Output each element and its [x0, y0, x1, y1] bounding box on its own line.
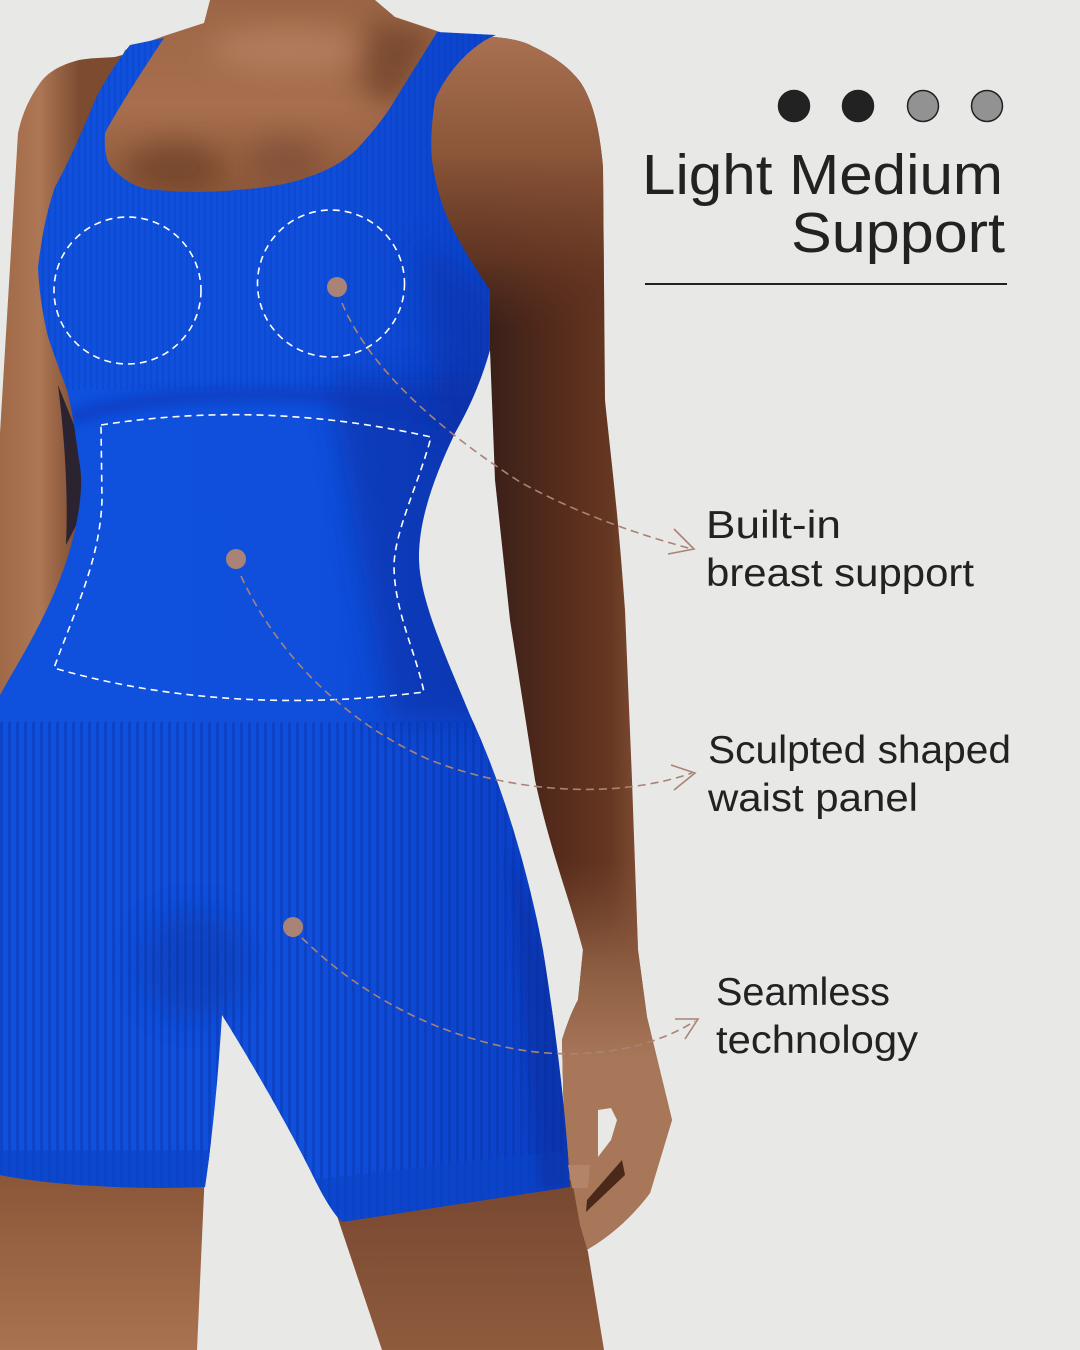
label: sculpted shaped waist panel: Sculpted shaped [708, 729, 1011, 772]
waist panel outline [54, 415, 431, 700]
cleavage shading right [245, 136, 325, 184]
callout connectors [226, 277, 698, 1054]
title [642, 143, 1005, 265]
connector: waist panel [226, 549, 695, 790]
label: seamless technology [716, 971, 919, 1062]
label: sculpted shaped waist panel: waist panel [707, 777, 918, 820]
chest shadow right [360, 20, 440, 110]
neck highlight [210, 28, 370, 72]
label: built-in breast support: breast support [706, 552, 974, 595]
hem of right leg [310, 1150, 570, 1225]
label: built-in breast support: Built-in [706, 504, 841, 547]
hem of left leg [0, 1150, 210, 1188]
label: built-in breast support [706, 504, 974, 595]
gap between fingers [598, 1108, 617, 1157]
inner thigh shadow [140, 910, 250, 1020]
left bust circle [54, 217, 201, 364]
armhole shading [416, 250, 490, 438]
fingernail [568, 1165, 590, 1188]
connector: seamless [283, 917, 698, 1054]
bust ribs [42, 32, 494, 390]
torso right shading [330, 380, 500, 720]
neck and chest skin [104, 0, 440, 192]
thigh: left in image [0, 1170, 205, 1350]
model's right arm (image left) [0, 50, 140, 720]
model's left arm and hand [425, 30, 685, 1270]
support level dots [778, 90, 1002, 122]
bodysuit [0, 32, 570, 1222]
figure: model wearing blue bodysuit [0, 0, 685, 1350]
connector: breast support [327, 277, 694, 554]
label: seamless technology: technology [716, 1019, 919, 1062]
hand [562, 880, 672, 1250]
label: sculpted shaped waist panel [707, 729, 1011, 820]
right bust circle [258, 210, 404, 357]
dashed outlines marking support zones [54, 210, 431, 700]
title: Support [791, 201, 1005, 265]
hand crease [586, 1160, 625, 1212]
shorts ribs [0, 722, 600, 1222]
label: seamless technology: Seamless [716, 971, 890, 1014]
title: Light Medium [642, 143, 1003, 207]
bust band shading [72, 385, 342, 424]
right edge shadow [510, 868, 570, 1191]
cleavage shading [125, 142, 225, 194]
thigh: right in image [335, 1180, 604, 1350]
mesh shadow under arm [58, 385, 84, 545]
title rule [645, 283, 1007, 285]
shoulder light [431, 36, 604, 314]
